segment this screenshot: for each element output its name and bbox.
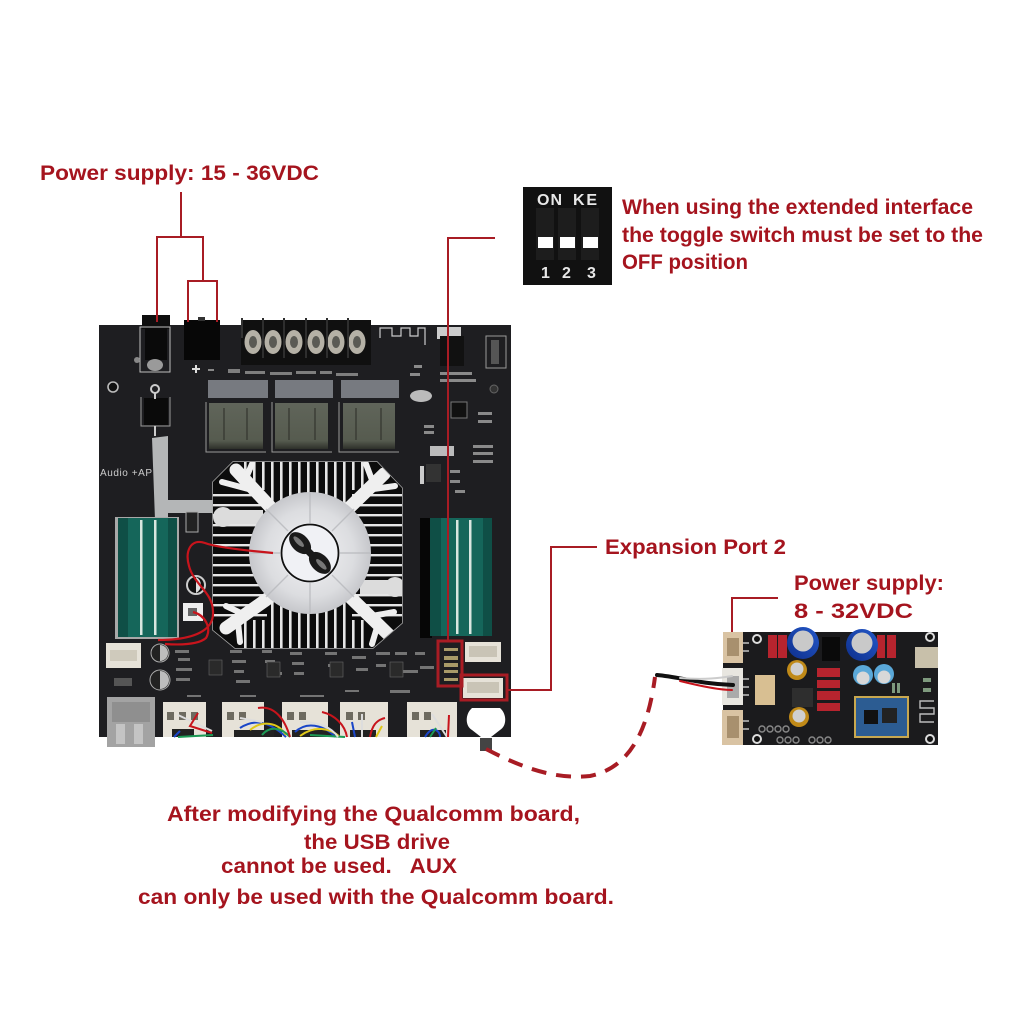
label: toggle switch instructions: the toggle switch must be set to the [622,223,983,247]
red highlight: toggle switch header [438,641,462,686]
mounting hole [108,382,118,392]
silver trace [152,436,225,520]
qualcomm module board [657,627,938,745]
module gold capacitors [787,660,809,727]
leader line: toggle switch [448,238,495,642]
mid-board silk components [114,644,434,697]
bluetooth module [855,697,908,737]
label: toggle switch instructions: When using the extended interface [622,195,973,219]
module connectors [722,632,749,745]
usb port [107,697,155,747]
label: module power supply: Power supply: [794,571,944,595]
module blue capacitors [787,627,878,661]
left electrolytic capacitors [115,517,179,639]
module op-amp chip [792,688,813,707]
power inductors [206,402,399,452]
heatsink studs [213,507,405,597]
note: qualcomm board limitations: cannot be used. AUX [221,854,458,878]
fan [249,492,371,614]
silk label: Audio +AP [100,468,152,479]
leader line: expansion port 2 [507,547,597,690]
dc power jack [134,315,170,372]
module regulator [822,637,840,661]
module red film capacitors [768,635,896,711]
wifi antenna trace [380,328,425,345]
red fan wires [158,542,273,644]
speaker terminal block [241,318,371,365]
bottom connectors with wires [163,702,457,737]
label: expansion port 2: Expansion Port 2 [605,535,786,559]
small parts near fan wire [183,512,205,621]
note: qualcomm board limitations: can only be used with the Qualcomm board. [138,885,614,909]
module pcb antenna [920,701,934,722]
film capacitors [208,380,399,398]
module light-blue capacitors [853,664,894,685]
note: qualcomm board limitations [138,802,614,909]
white connectors [106,642,503,698]
diode [141,385,170,436]
module relay [755,675,775,705]
right electrolytic capacitors [420,518,492,638]
right side components [410,327,506,493]
dip switch photo: KE [573,192,597,209]
dip switch photo: 3 [587,265,596,282]
header switch pins [444,648,458,681]
label: toggle switch instructions [622,195,983,274]
label: toggle switch instructions: OFF position [622,250,748,274]
note: qualcomm board limitations: the USB drive [304,830,450,854]
dip switch photo: 1 [541,265,550,282]
module wires [657,675,733,690]
module pcb [723,632,938,745]
label: module power supply [794,571,944,623]
white aux knock-out area [467,708,505,751]
fan hub logo [280,523,340,583]
main amplifier board [99,315,511,751]
red highlight: expansion port 2 [461,675,507,700]
heatsink diagonal arms [222,464,395,644]
dip switch photo: ON [537,192,562,209]
dip switch photo [523,187,612,285]
pcb base [99,325,511,737]
leader lines: power supply [157,192,217,322]
screw-in power input block [184,317,220,373]
module pads [759,726,831,743]
dashed connection arrow [486,677,655,777]
label: module power supply: 8 - 32VDC [794,599,913,623]
dip switch photo: 2 [562,265,571,282]
label: main power supply: Power supply: 15 - 36VDC [40,161,319,185]
note: qualcomm board limitations: After modifying the Qualcomm board, [167,802,580,826]
smd row under terminal [228,369,358,376]
module leds [892,678,931,693]
heatsink [213,462,405,649]
module corner holes [753,633,934,743]
leader line: small board power [732,598,778,640]
usb-c port [915,647,938,668]
